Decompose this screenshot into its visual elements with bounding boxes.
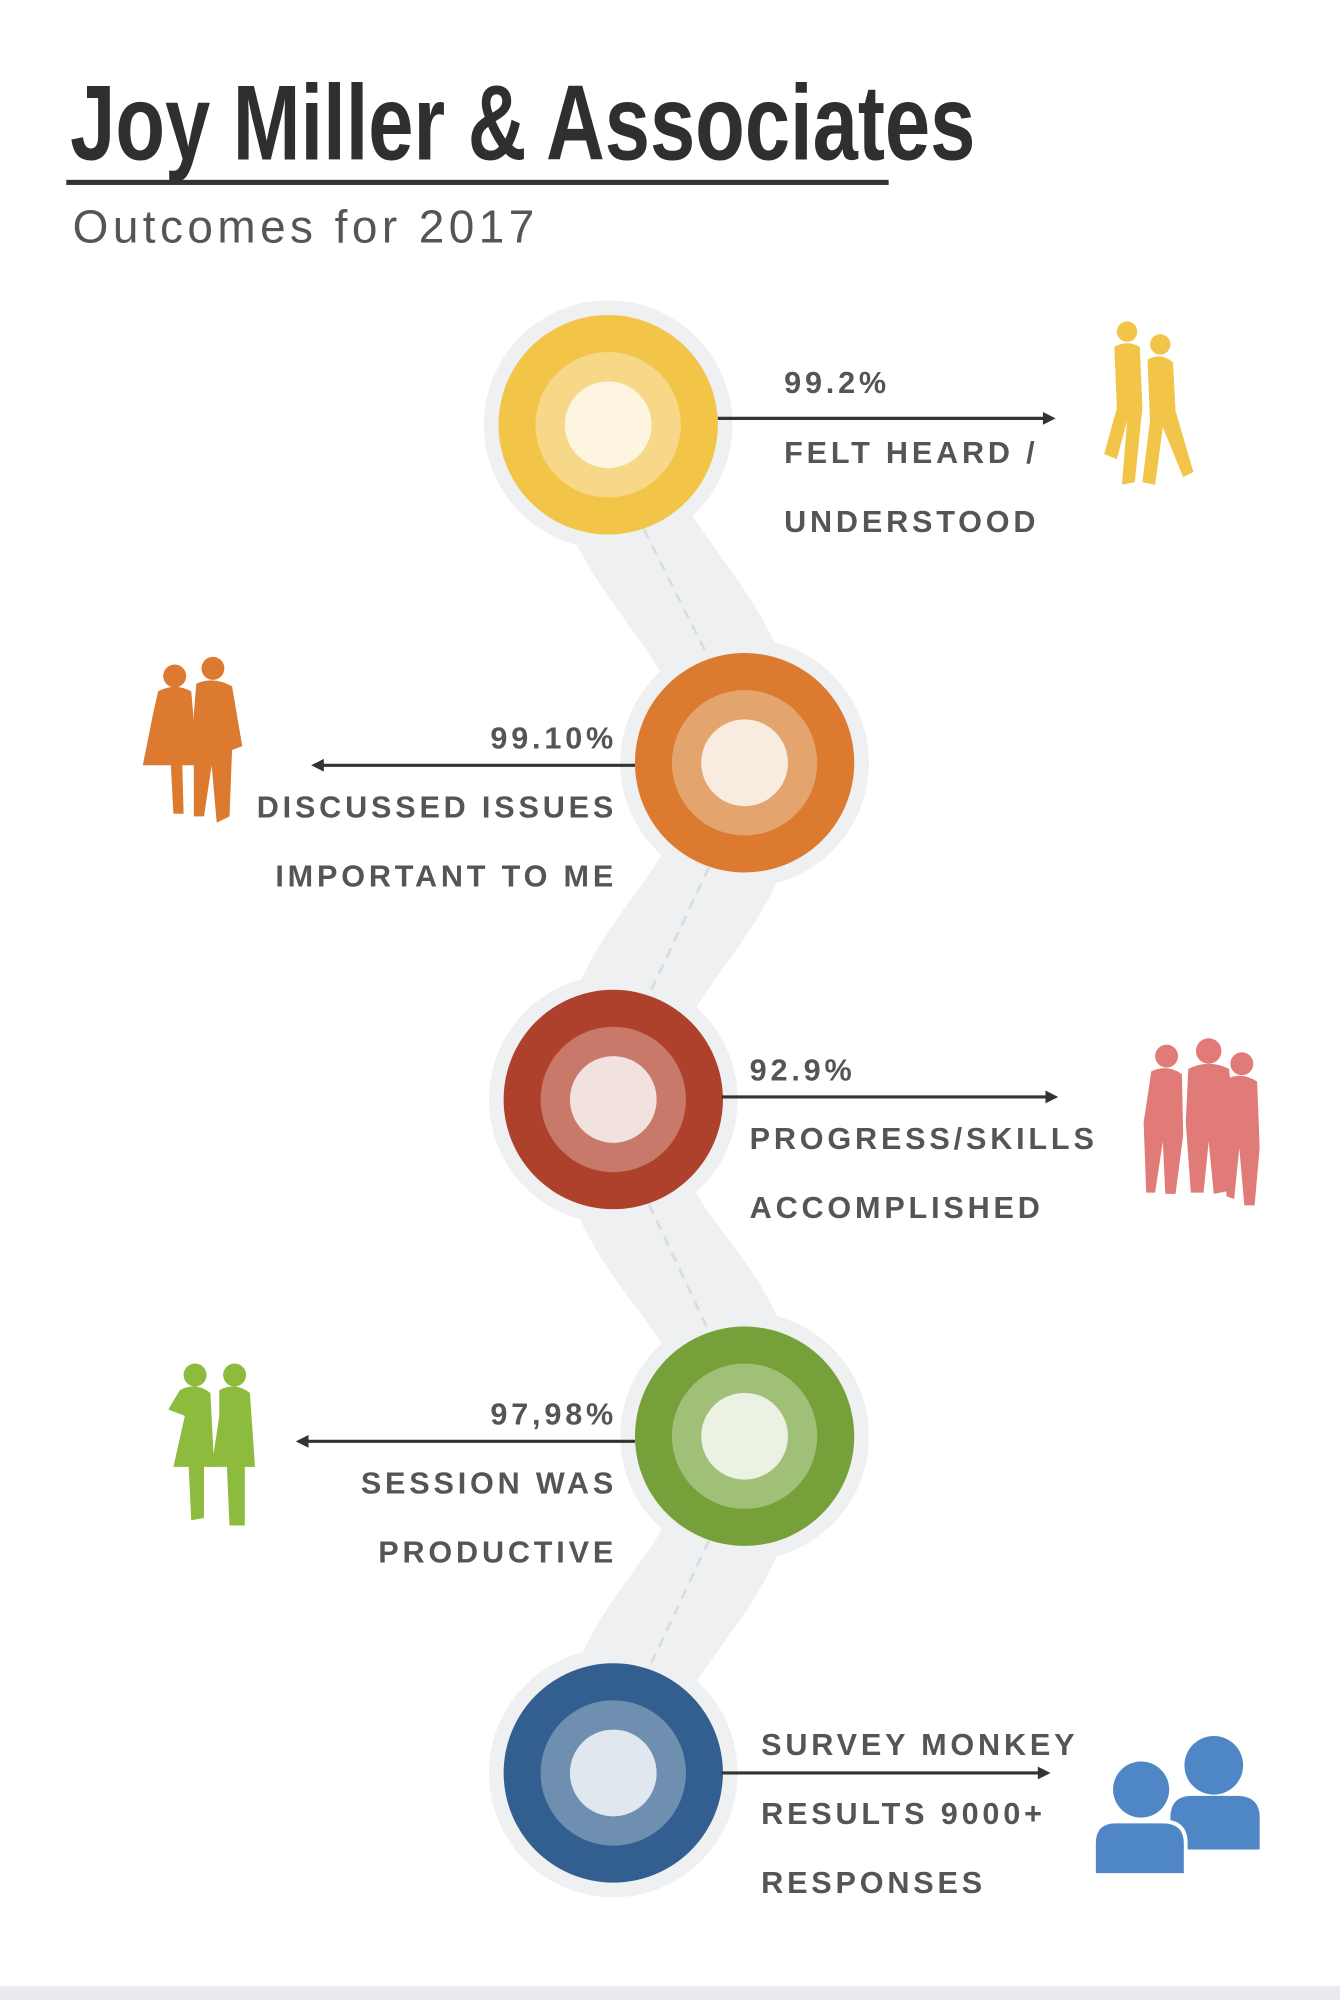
icon: walking couple yellow [1104,321,1193,485]
icon: women green [168,1364,255,1526]
text 1: FELT HEARD / [784,436,1038,470]
text 2: 99.10% [490,722,617,756]
arrows [296,412,1058,1779]
text 2: IMPORTANT TO ME [275,859,617,893]
circle 5 [504,1663,723,1883]
text 1 [784,366,1039,539]
text 1: 99.2% [784,366,890,400]
text 4: PRODUCTIVE [378,1535,617,1570]
text 2 [257,722,617,893]
text 5: RESPONSES [761,1866,986,1900]
text 5 [761,1728,1078,1900]
icon: users blue [1094,1736,1260,1875]
subtitle: Outcomes for 2017 [73,200,539,252]
ribbon background [484,301,868,1897]
text 3: ACCOMPLISHED [750,1191,1044,1225]
icon: group red [1144,1038,1260,1205]
text 3: 92.9% [750,1053,856,1087]
text 4: SESSION WAS [361,1467,617,1501]
text 1: UNDERSTOOD [784,505,1039,539]
text 5: SURVEY MONKEY [761,1728,1078,1762]
text 3 [750,1053,1098,1225]
circle 1 [499,315,718,534]
circle 2 [635,653,854,872]
text 2: DISCUSSED ISSUES [257,791,617,825]
text 4: 97,98% [490,1398,617,1432]
text 3: PROGRESS/SKILLS [750,1122,1098,1156]
icon: couple orange [143,657,242,823]
text 4 [361,1398,617,1570]
circle 3 [504,990,723,1209]
title: Joy Miller & Associates [70,62,975,182]
text 5: RESULTS 9000+ [761,1797,1046,1831]
circle 4 [635,1327,854,1546]
